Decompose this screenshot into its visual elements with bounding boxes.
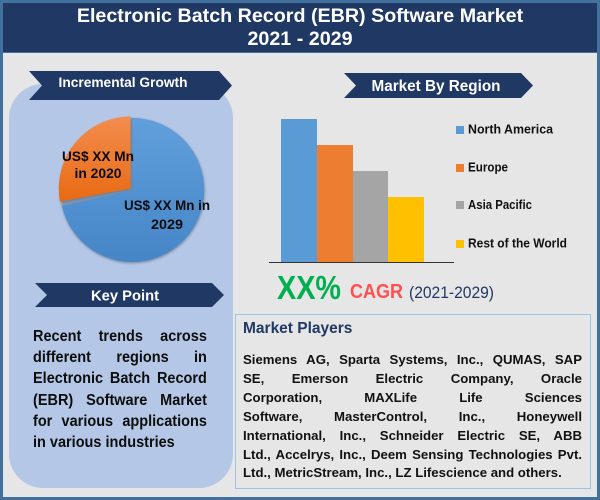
market players list: SE, Emerson Electric Company, Oracle (243, 371, 582, 386)
pie chart: incremental growth (58, 116, 210, 264)
title banner: 2021 - 2029 (247, 28, 353, 50)
market players list: Ltd., MetricStream, Inc., LZ Lifescience and others. (243, 465, 562, 480)
text block: key point: Electronic Batch Record (33, 370, 207, 387)
title banner: Electronic Batch Record (EBR) Software Market (77, 5, 523, 27)
market players list (243, 352, 582, 480)
market players heading: Market Players (243, 320, 352, 337)
panel: left growth and key point (9, 84, 233, 488)
market players list: Corporation, MAXLife Life Sciences (243, 390, 582, 405)
CAGR callout: CAGR (350, 281, 403, 303)
bar chart: market by region (269, 119, 454, 263)
bar: North America (281, 119, 317, 262)
ribbon: Incremental Growth heading (29, 71, 232, 100)
ribbon: Market By Region heading: Market By Region (372, 78, 500, 95)
text block: key point: Recent trends across (33, 328, 207, 345)
text block: key point: for various applications (33, 413, 207, 430)
pie slice: 2029 (62, 118, 204, 262)
pie label: 2029: 2029 (151, 216, 183, 232)
bar: Rest of the World (388, 197, 424, 262)
legend item: North America: North America (468, 122, 554, 136)
ribbon: Key Point heading (35, 283, 224, 307)
text block: key point (33, 328, 207, 451)
market players list: Ltd., Accelrys, Inc., Deem Sensing Technologies Pvt. (243, 447, 582, 462)
ribbon: Key Point heading: Key Point (91, 288, 159, 304)
text block: key point: in various industries (33, 434, 175, 451)
pie shadow (60, 118, 205, 264)
market players list: Software, MasterControl, Inc., Honeywell (243, 409, 582, 424)
pie label: 2020: in 2020 (74, 165, 122, 181)
CAGR callout: XX% (277, 269, 341, 306)
market players list: Siemens AG, Sparta Systems, Inc., QUMAS, SAP (243, 352, 582, 367)
pie slice shadow (60, 118, 132, 202)
legend item: Asia Pacific: Asia Pacific (468, 197, 532, 212)
panel: market players (235, 314, 591, 489)
pie label: 2020 (62, 148, 134, 181)
pie label: 2029 (124, 197, 210, 232)
CAGR callout: (2021-2029) (409, 284, 494, 302)
legend item: Rest of the World: Rest of the World (468, 236, 567, 250)
CAGR callout (277, 269, 494, 306)
pie label: 2020: US$ XX Mn (62, 148, 134, 164)
market players list: International, Inc., Schneider Electric SE, ABB (243, 428, 582, 443)
ribbon: Market By Region heading (344, 73, 533, 98)
bar: Europe (317, 145, 353, 262)
text block: key point: different regions in (33, 349, 207, 366)
pie slice: 2020 (59, 116, 130, 202)
title banner (3, 3, 597, 53)
legend (456, 122, 567, 250)
ribbon: Incremental Growth heading: Incremental Growth (58, 74, 188, 90)
text block: key point: (EBR) Software Market (33, 392, 207, 409)
pie label: 2029: US$ XX Mn in (124, 197, 210, 213)
legend item: Europe: Europe (468, 160, 508, 174)
bar: Asia Pacific (353, 171, 388, 262)
